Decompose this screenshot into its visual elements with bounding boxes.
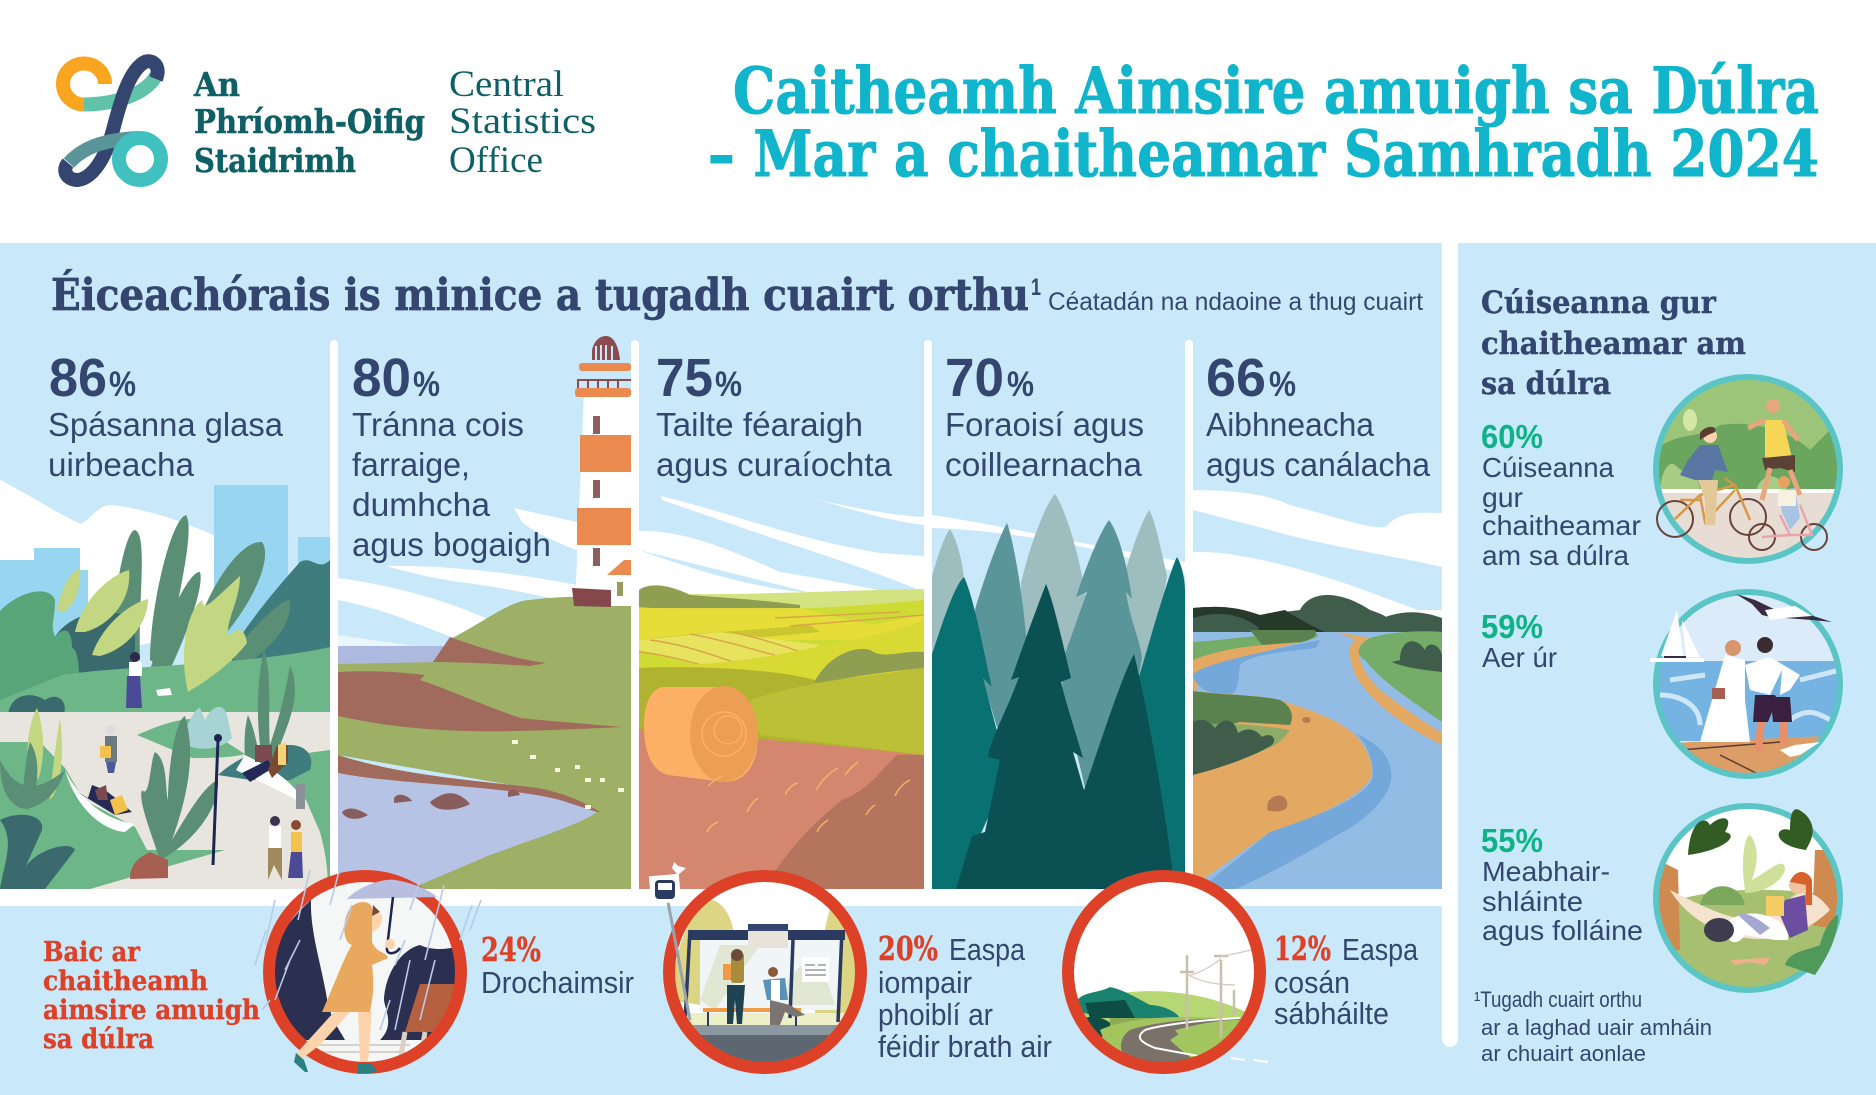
heading: reasons: chaitheamar am: [1481, 326, 1746, 362]
stat: public transport: Easpa: [949, 932, 1026, 967]
white band and gutter: [0, 243, 1458, 1047]
logo text: Irish name: [193, 65, 425, 180]
icon: seaside circle: [1650, 592, 1850, 790]
title: [708, 54, 1819, 192]
stat: reason 55%: agus folláine: [1482, 915, 1643, 946]
panel: main ecosystems background: [0, 243, 1442, 1095]
stat: reason 55%: shláinte: [1482, 886, 1583, 917]
stat: bad weather: Drochaimsir: [481, 965, 634, 1000]
stat: grasslands: [656, 348, 893, 483]
illustration: forests and woodlands: [932, 494, 1185, 889]
stat: safe paths: cosán: [1274, 965, 1350, 1000]
heading: barriers: chaitheamh: [43, 966, 208, 997]
heading: barriers: [43, 937, 260, 1055]
stat: public transport: iompair: [878, 965, 972, 1000]
stat: beaches: farraige,: [352, 446, 470, 483]
footnote: ¹Tugadh cuairt orthu: [1474, 987, 1642, 1012]
stat: reason 59%: 59%: [1481, 608, 1543, 645]
stat: safe paths: [1274, 929, 1419, 1031]
icon: country road circle: [1068, 876, 1268, 1085]
logo text: Irish name: Phríomh-Oifig: [194, 102, 425, 141]
stat: beaches: agus bogaigh: [352, 526, 551, 563]
stat: grasslands: agus curaíochta: [656, 446, 893, 483]
stat: reason 55%: 55%: [1481, 822, 1543, 859]
stat: safe paths: Easpa: [1342, 932, 1419, 967]
stat: rivers: 66: [1206, 348, 1266, 408]
illustration: urban green spaces: [0, 480, 330, 889]
icon: hammock circle: [1650, 806, 1850, 1000]
panel: reasons background: [1458, 243, 1876, 1095]
stat: reason 59%: [1481, 608, 1557, 673]
heading: reasons: sa dúlra: [1481, 366, 1611, 402]
stat: rivers: Aibhneacha: [1206, 406, 1375, 443]
stat: beaches: dumhcha: [352, 486, 491, 523]
stat: rivers: [1206, 348, 1431, 483]
footnote: ar chuairt aonlae: [1481, 1041, 1646, 1066]
stat: rivers: agus canálacha: [1206, 446, 1431, 483]
stat: grasslands: Tailte féaraigh: [656, 406, 863, 443]
stat: grasslands: %: [715, 365, 742, 404]
stat: reason 60%: 60%: [1481, 418, 1543, 455]
illustration: grasslands and farmland: [639, 496, 924, 889]
stat: forests: Foraoisí agus: [945, 406, 1144, 443]
stat: forests: [945, 348, 1144, 483]
stat: reason 60%: [1481, 418, 1641, 571]
stat: urban green spaces: [48, 348, 284, 483]
heading: reasons: Cúiseanna gur: [1481, 285, 1717, 321]
stat: safe paths: 12%: [1274, 929, 1331, 968]
icon: rain circle: [255, 868, 481, 1074]
stat: forests: 70: [945, 348, 1004, 408]
stat: bad weather: [481, 930, 634, 1000]
stat: reason 55%: Meabhair-: [1482, 856, 1610, 887]
stat: reason 60%: Cúiseanna: [1482, 452, 1614, 483]
icon: cycling circle: [1650, 377, 1850, 573]
stat: urban green spaces: 86: [49, 348, 107, 408]
logo text: English name: Office: [449, 140, 543, 181]
logo text: Irish name: Staidrimh: [194, 141, 356, 180]
stat: beaches: %: [413, 365, 440, 404]
stat: reason 60%: am sa dúlra: [1482, 540, 1629, 571]
heading: barriers: sa dúlra: [43, 1024, 154, 1055]
stat: urban green spaces: Spásanna glasa: [48, 406, 284, 443]
footnote: [1474, 987, 1712, 1066]
blue join below gutter: [1442, 1030, 1458, 1095]
stat: reason 60%: gur: [1482, 482, 1523, 513]
illustration: rivers and canals: [1193, 490, 1442, 889]
heading: reasons: [1481, 285, 1746, 402]
stat: grasslands: 75: [656, 348, 713, 408]
stat: beaches: [352, 348, 551, 563]
stat: urban green spaces: %: [109, 365, 136, 404]
heading: barriers: Baic ar: [43, 937, 141, 968]
stat: rivers: %: [1269, 365, 1296, 404]
stat: public transport: 20%: [878, 929, 938, 968]
stat: forests: coillearnacha: [945, 446, 1143, 483]
stat: forests: %: [1007, 365, 1034, 404]
stat: beaches: Tránna cois: [352, 406, 524, 443]
stat: public transport: [878, 929, 1052, 1064]
heading: ecosystems: 1: [1031, 274, 1041, 301]
stat: reason 55%: [1481, 822, 1643, 946]
stat: public transport: phoiblí ar: [878, 997, 993, 1032]
footnote: ar a laghad uair amháin: [1481, 1015, 1712, 1040]
vertical dividers: [330, 340, 1193, 892]
heading: ecosystems: Éiceachórais is minice a tugadh cuairt orthu: [51, 268, 1029, 321]
heading: ecosystems: Céatadán na ndaoine a thug cuairt: [1048, 288, 1423, 316]
stat: reason 60%: chaitheamar: [1482, 510, 1641, 541]
logo text: English name: Central: [449, 64, 564, 105]
stat: public transport: féidir brath air: [878, 1029, 1052, 1064]
illustration: beaches, dunes and bogs: [338, 336, 631, 889]
heading: barriers: aimsire amuigh: [43, 995, 260, 1026]
logo text: Irish name: An: [193, 65, 240, 104]
stat: beaches: 80: [352, 348, 411, 408]
stat: bad weather: 24%: [481, 930, 541, 969]
stat: reason 59%: Aer úr: [1482, 642, 1557, 673]
icon: bus stop circle: [649, 862, 861, 1075]
logo text: English name: Statistics: [449, 101, 596, 142]
logo mark: [63, 61, 161, 180]
logo text: English name: [449, 64, 596, 181]
stat: safe paths: sábháilte: [1274, 996, 1389, 1031]
stat: urban green spaces: uirbeacha: [48, 446, 195, 483]
